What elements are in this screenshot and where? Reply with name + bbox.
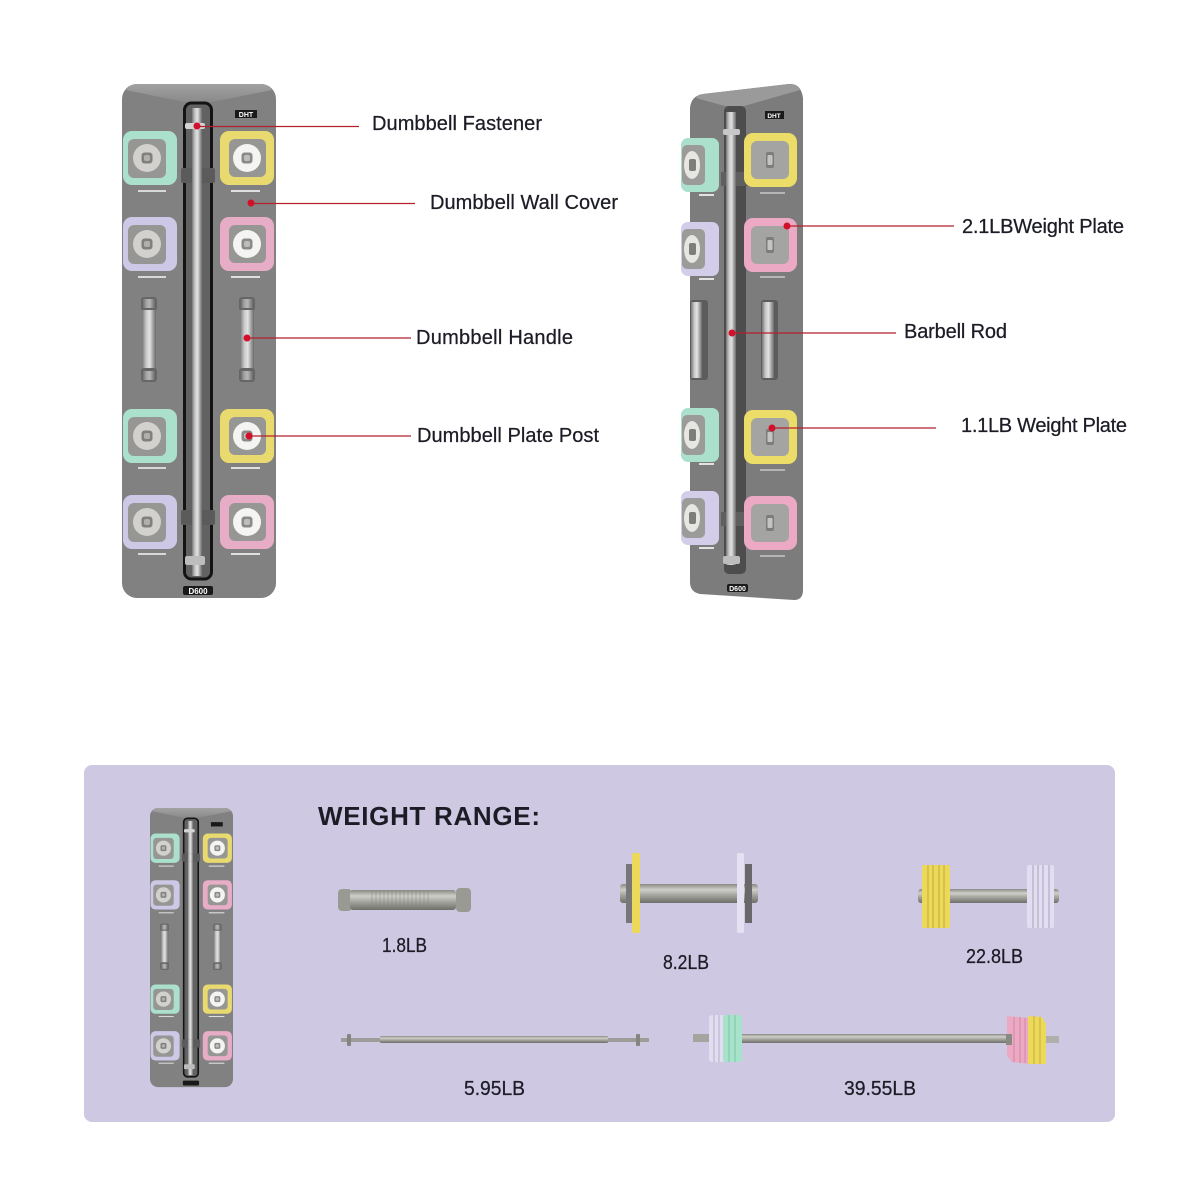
item: barbell rod 5.95LB: 5.95LB [464, 1078, 525, 1100]
item: barbell 39.55LB: 39.55LB [844, 1078, 916, 1100]
panel: front view of wall storage [122, 84, 276, 598]
item: barbell 39.55LB [693, 1015, 1059, 1100]
callout: Dumbbell Handle [244, 327, 573, 349]
weight plates, front view [744, 133, 797, 550]
callout: 1.1LB Weight Plate [768, 415, 1127, 437]
callout: Dumbbell Plate Post: Dumbbell Plate Post [417, 425, 599, 447]
brand badge: DHT [767, 113, 781, 120]
item: dumbbell 8.2LB [620, 853, 758, 974]
weight plates, side view [681, 138, 719, 545]
callout: Dumbbell Handle: Dumbbell Handle [416, 327, 573, 349]
callout: Dumbbell Wall Cover [248, 192, 618, 214]
callout: Dumbbell Plate Post [246, 425, 599, 447]
callout: Barbell Rod: Barbell Rod [904, 321, 1007, 343]
thumbnail of wall storage [150, 808, 233, 1087]
handles [690, 300, 778, 380]
item: handle 1.8LB: 1.8LB [382, 935, 427, 957]
brand badge: DHT [239, 112, 254, 119]
callout: Dumbbell Fastener: Dumbbell Fastener [372, 113, 542, 135]
callout: 2.1LB Weight Plate: 2.1LBWeight Plate [962, 216, 1124, 238]
callout: Barbell Rod [728, 321, 1007, 343]
item: handle 1.8LB [338, 888, 471, 957]
item: dumbbell 22.8LB: 22.8LB [966, 946, 1023, 968]
callout: 2.1LB Weight Plate [784, 216, 1124, 238]
heading: WEIGHT RANGE: [318, 801, 540, 831]
model badge: D600 [729, 586, 746, 593]
item: dumbbell 22.8LB [918, 865, 1059, 968]
item: dumbbell 8.2LB: 8.2LB [663, 952, 709, 974]
callout: Dumbbell Fastener [194, 113, 542, 135]
callout: 1.1LB Weight Plate: 1.1LB Weight Plate [961, 415, 1127, 437]
model badge: D600 [188, 587, 208, 596]
item: barbell rod 5.95LB [341, 1034, 649, 1100]
callout: Dumbbell Wall Cover: Dumbbell Wall Cover [430, 192, 618, 214]
panel: weight range [84, 765, 1115, 1122]
panel: angled view of wall storage [681, 84, 803, 600]
